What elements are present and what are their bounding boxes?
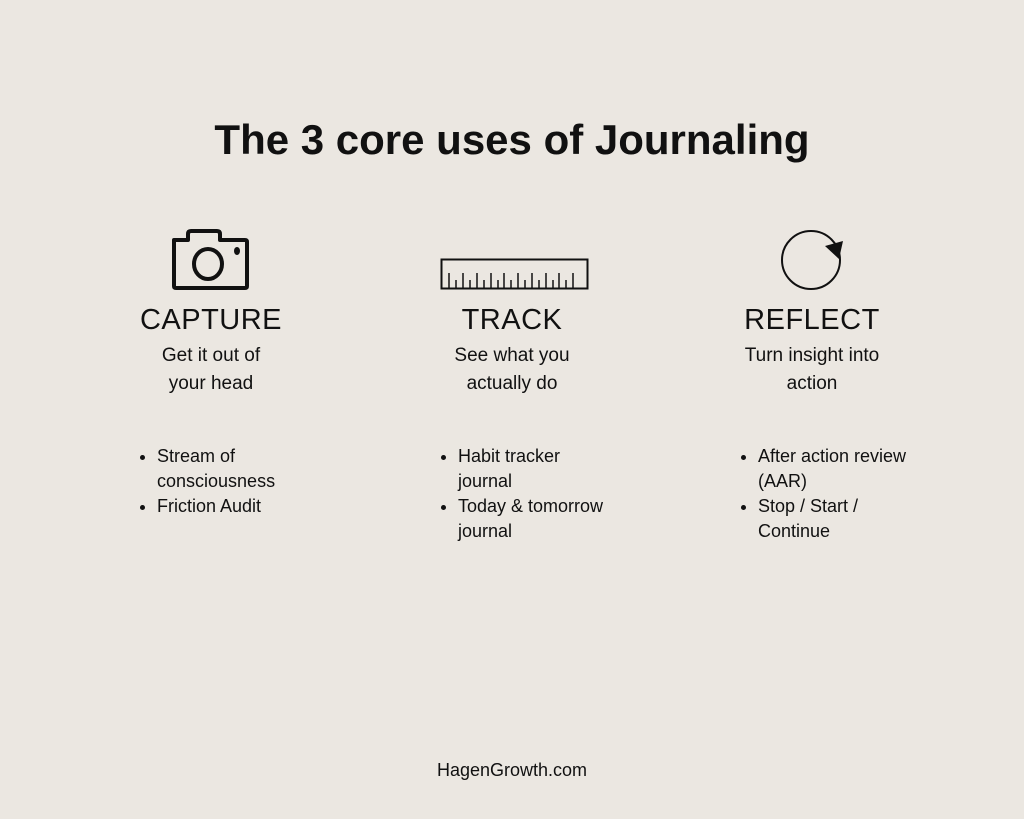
icon: ruler bbox=[440, 258, 588, 290]
subtitle: reflect: action bbox=[787, 373, 837, 394]
icon: cycle bbox=[781, 230, 843, 290]
list: reflect bbox=[741, 446, 906, 541]
subtitle: track bbox=[454, 345, 570, 394]
subtitle: capture: your head bbox=[169, 373, 253, 394]
list: capture bbox=[140, 446, 275, 516]
heading: reflect: REFLECT bbox=[744, 304, 880, 336]
column: reflect bbox=[744, 304, 880, 394]
subtitle: track: actually do bbox=[467, 373, 557, 394]
icon: camera bbox=[172, 229, 249, 290]
list: reflect: Stop / Start / Continue bbox=[758, 496, 858, 541]
column: track bbox=[454, 304, 570, 394]
heading: capture: CAPTURE bbox=[140, 304, 282, 336]
list: reflect: After action review (AAR) bbox=[758, 446, 906, 491]
list: track bbox=[441, 446, 603, 541]
list: track: Today & tomorrow journal bbox=[458, 496, 603, 541]
list: capture: Stream of consciousness bbox=[157, 446, 275, 491]
column: capture bbox=[140, 304, 282, 394]
subtitle: track: See what you bbox=[454, 345, 570, 366]
heading: track: TRACK bbox=[462, 304, 562, 336]
subtitle: reflect: Turn insight into bbox=[745, 345, 879, 366]
footer: HagenGrowth.com bbox=[437, 760, 587, 780]
subtitle: capture: Get it out of bbox=[162, 345, 260, 366]
subtitle: capture bbox=[162, 345, 260, 394]
title: The 3 core uses of Journaling bbox=[214, 116, 810, 163]
list: track: Habit tracker journal bbox=[458, 446, 560, 491]
subtitle: reflect bbox=[745, 345, 879, 394]
list: capture: Friction Audit bbox=[157, 496, 261, 516]
